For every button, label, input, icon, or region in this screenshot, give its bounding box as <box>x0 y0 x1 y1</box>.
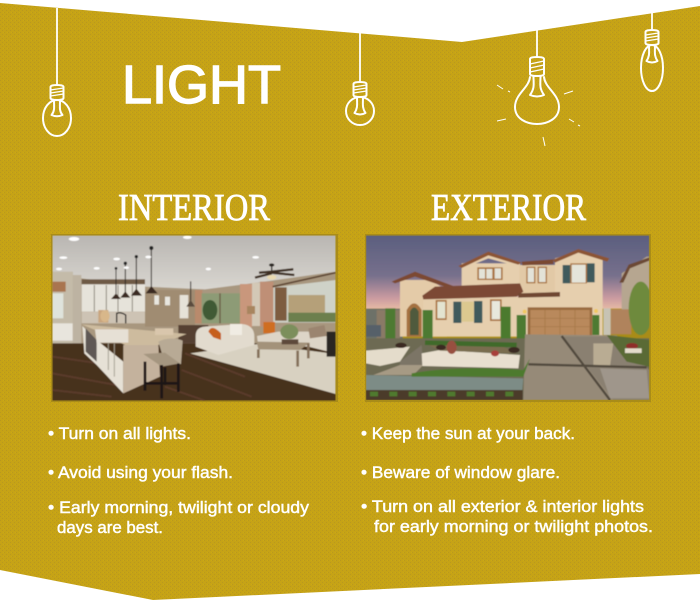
icon: lit hanging bulb with rays <box>497 30 580 146</box>
tip: exterior and interior lights <box>361 498 653 536</box>
heading: exterior: EXTERIOR <box>431 187 587 229</box>
tip: turn on all lights: • Turn on all lights. <box>48 425 191 443</box>
tip: avoid flash: • Avoid using your flash. <box>48 464 233 482</box>
exterior tips list <box>361 425 653 536</box>
tip: best times to shoot: days are best. <box>57 519 163 537</box>
tip: exterior and interior lights: • Turn on all exterior & interior lights <box>361 498 644 516</box>
tip: best times to shoot: • Early morning, twilight or cloudy <box>48 499 310 517</box>
icon: hanging bulb 4 <box>641 13 663 91</box>
icon: hanging bulb 2 <box>346 33 374 125</box>
tip: window glare: • Beware of window glare. <box>361 464 560 482</box>
tip: sun at your back: • Keep the sun at your back. <box>361 425 575 443</box>
icon: hanging bulb 1 <box>43 8 71 136</box>
heading: interior: INTERIOR <box>118 187 271 229</box>
photo: house exterior at twilight <box>365 234 653 402</box>
photo: interior living room and kitchen <box>51 234 338 402</box>
tip: exterior and interior lights: for early morning or twilight photos. <box>374 518 653 536</box>
title: LIGHT <box>122 55 281 115</box>
tip: best times to shoot <box>48 499 310 537</box>
interior tips list <box>48 425 310 537</box>
